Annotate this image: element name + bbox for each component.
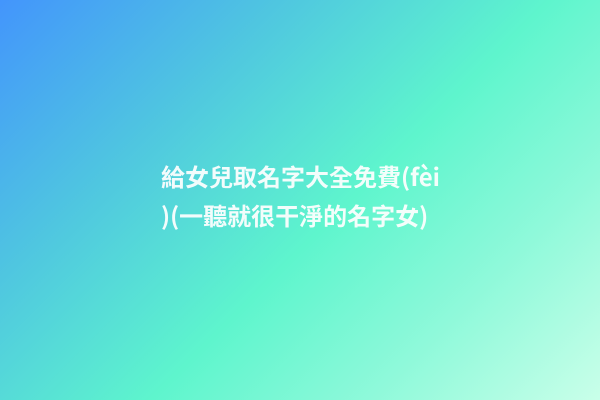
- title: [161, 158, 440, 232]
- title: 給女兒取名字大全免費(fèi: [161, 158, 440, 193]
- title: )(一聽就很干淨的名字女): [161, 197, 428, 232]
